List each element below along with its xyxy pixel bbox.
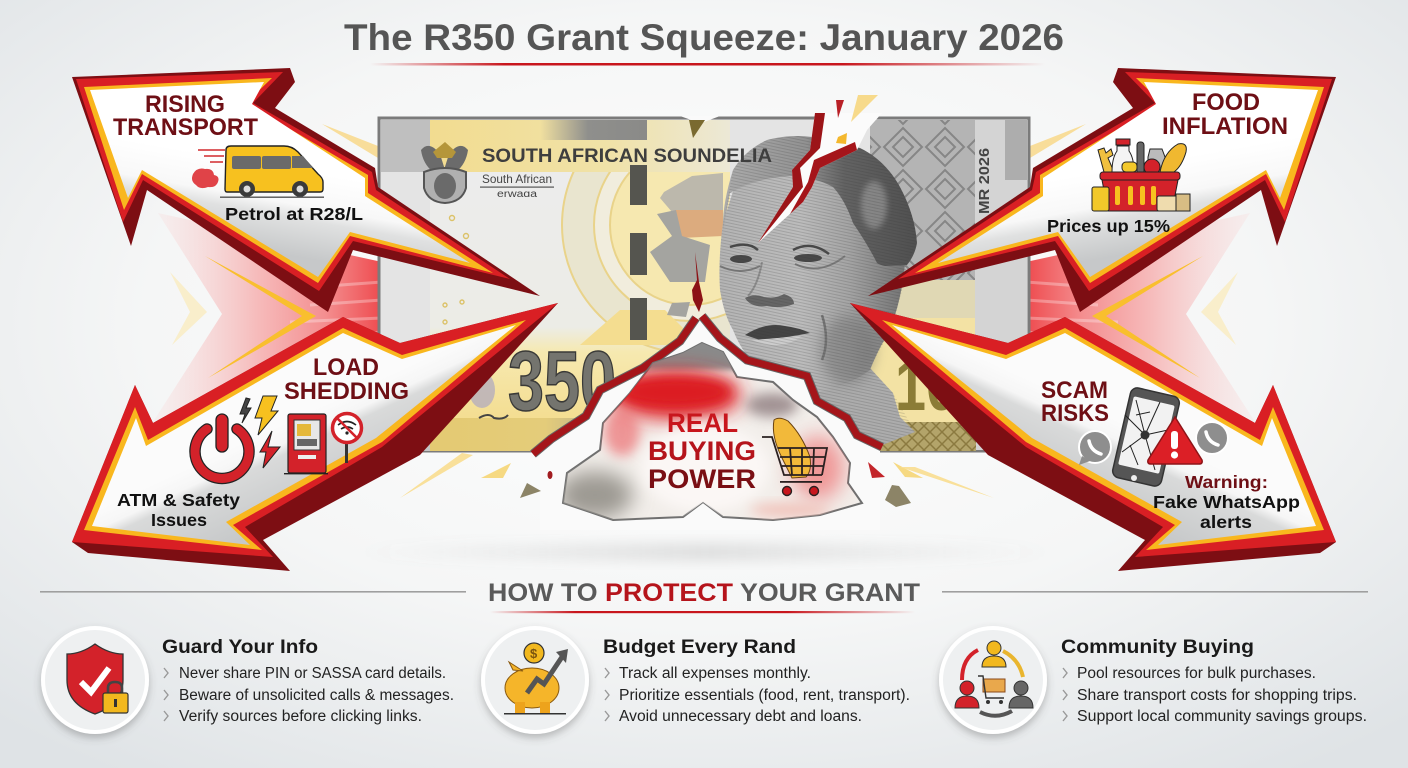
bullet list: Share transport costs for shopping trips. — [1077, 687, 1357, 704]
heading: INFLATION — [1162, 113, 1288, 140]
icon: power symbol — [195, 414, 249, 478]
hair — [723, 136, 917, 266]
shattered centre: real buying power — [533, 252, 882, 530]
vertical date: MR 2026 — [976, 148, 993, 214]
title: The R350 Grant Squeeze: January 2026 — [344, 17, 1064, 58]
bullet list — [605, 665, 910, 725]
label: alerts — [1200, 512, 1252, 532]
real buying power text: REAL — [667, 408, 738, 438]
heading: SHEDDING — [284, 378, 409, 405]
map watermark — [660, 173, 723, 212]
label: ATM & Safety — [117, 490, 240, 510]
icon: shield and lock — [43, 628, 147, 732]
gold dots — [443, 216, 468, 324]
arrow: food inflation — [868, 68, 1336, 312]
coat of arms — [421, 142, 468, 203]
bullet list: Pool resources for bulk purchases. — [1077, 665, 1316, 682]
neck and shoulder — [813, 368, 915, 450]
ground shadow — [355, 543, 1055, 561]
label: Warning: — [1185, 472, 1268, 492]
icon: warning triangle — [1148, 417, 1202, 464]
bullet list: Support local community savings groups. — [1077, 708, 1367, 725]
heading: Budget Every Rand — [603, 637, 796, 658]
security thread — [630, 165, 647, 420]
arrow: rising transport — [72, 68, 540, 312]
icon: piggy bank: $ — [530, 646, 538, 661]
rosette — [561, 172, 730, 350]
torn upper crack — [758, 113, 882, 243]
bullet list: Avoid unnecessary debt and loans. — [619, 708, 862, 725]
heading: TRANSPORT — [113, 114, 258, 141]
tip: budget every rand — [483, 628, 910, 732]
left crack band — [533, 318, 696, 454]
heading — [1162, 89, 1288, 140]
icon: whatsapp left — [1079, 431, 1111, 465]
label: Petrol at R28/L — [225, 204, 363, 224]
arrow: scam risks — [850, 303, 1336, 571]
icon: minibus taxi — [192, 146, 324, 198]
face — [719, 170, 905, 394]
label: Fake WhatsApp — [1153, 492, 1300, 512]
label — [117, 490, 240, 530]
jaw shadow — [820, 316, 876, 384]
tip: guard your info — [43, 628, 454, 732]
heading: LOAD — [313, 354, 379, 381]
arrow body — [72, 68, 540, 312]
heading: Community Buying — [1061, 637, 1254, 658]
bullet list — [164, 665, 454, 725]
icon: piggy bank — [483, 628, 587, 732]
icon: atm — [284, 414, 328, 474]
bullet list — [1063, 665, 1367, 725]
arrow body — [72, 303, 558, 571]
debris and shards — [400, 95, 994, 507]
grey hair patch — [861, 181, 887, 229]
real buying power text: BUYING — [648, 436, 756, 466]
label: Issues — [151, 510, 207, 530]
label — [1153, 472, 1300, 532]
protect heading: HOW TO PROTECT YOUR GRANT — [488, 579, 920, 607]
left pressure burst — [153, 124, 382, 422]
banknote — [379, 97, 1029, 451]
right crack band — [702, 316, 882, 447]
bullet list: Track all expenses monthly. — [619, 665, 811, 682]
upper thin crack — [692, 252, 703, 312]
heading — [284, 354, 409, 405]
note panels — [381, 120, 1027, 451]
right pressure burst — [1026, 124, 1255, 422]
tip: community buying — [941, 628, 1367, 732]
mouth — [745, 315, 826, 360]
note base — [379, 118, 1029, 451]
heading: FOOD — [1192, 89, 1260, 116]
note sub label: South African — [482, 172, 552, 186]
heading — [1041, 377, 1109, 427]
top tear notch — [680, 116, 720, 138]
real buying power text — [648, 408, 756, 494]
icon: whatsapp right — [1196, 422, 1228, 454]
icon: shopping cart — [762, 418, 827, 496]
heading: RISING — [145, 91, 225, 118]
heading: SCAM — [1041, 377, 1108, 404]
heading — [113, 91, 258, 141]
arrow body — [868, 68, 1336, 312]
bird mark — [479, 415, 508, 419]
white tear gap — [540, 320, 880, 530]
arrow: load shedding — [72, 303, 558, 571]
note heading: SOUTH AFRICAN SOUNDELIA — [482, 146, 772, 167]
bullet list: Never share PIN or SASSA card details. — [179, 665, 446, 682]
icon: lightning bolts — [240, 396, 280, 468]
purple watermark — [469, 372, 495, 408]
denomination 350: 350 — [508, 334, 616, 428]
icon: community cart — [941, 628, 1045, 732]
note rule — [480, 186, 554, 188]
icon: no wifi sign — [332, 414, 362, 463]
bullet list: Beware of unsolicited calls & messages. — [179, 687, 454, 704]
brows and eyes — [720, 245, 845, 271]
heading: Guard Your Info — [162, 637, 318, 658]
heading: RISKS — [1041, 400, 1109, 427]
icon: cracked phone — [1111, 387, 1181, 487]
cavity glow — [557, 335, 844, 519]
real buying power text: POWER — [648, 464, 756, 494]
title underline — [370, 63, 1045, 66]
icon: grocery basket — [1092, 139, 1190, 211]
portrait — [719, 136, 917, 450]
engraving lines — [719, 136, 917, 450]
note sub label 2: erwaɑa — [497, 189, 538, 200]
cavity — [563, 343, 862, 520]
denomination 10: 10 — [895, 346, 957, 426]
arrow body — [850, 303, 1336, 571]
bullet list: Verify sources before clicking links. — [179, 708, 422, 725]
nose — [745, 262, 794, 307]
label: Prices up 15% — [1047, 216, 1170, 236]
bullet list: Prioritize essentials (food, rent, transport). — [619, 687, 910, 704]
